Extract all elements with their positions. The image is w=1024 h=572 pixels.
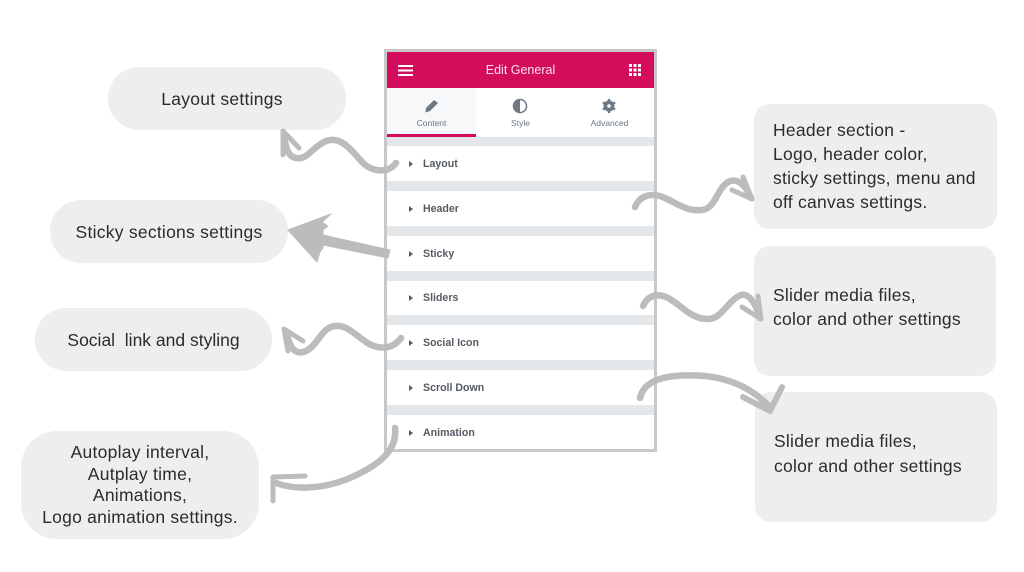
icon: hamburger menu: [398, 65, 413, 76]
icon: gear: [602, 99, 616, 113]
callout: slider settings: [754, 246, 996, 376]
row: social icon: Social Icon: [423, 337, 479, 349]
label: advanced: Advanced: [591, 118, 628, 128]
callout: sticky sections settings: [50, 200, 288, 263]
panel header: [387, 52, 654, 88]
callout: layout settings: Layout settings: [161, 88, 283, 108]
callout: slider settings: Slider media files,: [773, 285, 916, 305]
callout: social link and styling: [35, 308, 272, 371]
arrow: layout: [283, 131, 396, 170]
callout: scroll down settings: Slider media files,: [774, 431, 917, 451]
callout: header section: off canvas settings.: [773, 192, 928, 212]
callout: autoplay and animation settings: Autoplay interval,: [71, 442, 209, 462]
row: scroll down: Scroll Down: [423, 382, 484, 394]
callout: header section: Header section -: [773, 120, 905, 140]
callout: scroll down settings: color and other settings: [774, 456, 962, 476]
callout: autoplay and animation settings: [21, 431, 259, 539]
icon: half circle style: [512, 98, 528, 114]
callout: autoplay and animation settings: Logo animation settings.: [42, 506, 238, 526]
icon: grid: [629, 64, 641, 76]
callout: sticky sections settings: Sticky sections settings: [76, 222, 262, 242]
callout: autoplay and animation settings: Animations,: [93, 485, 187, 505]
arrow: social: [284, 326, 401, 352]
callout: layout settings: [108, 67, 346, 130]
callout: slider settings: color and other settings: [773, 309, 961, 329]
label: style: Style: [511, 118, 530, 128]
callout: header section: Logo, header color,: [773, 144, 928, 164]
row: layout: Layout: [423, 158, 458, 170]
heading: edit general: Edit General: [486, 63, 555, 77]
arrow: sliders: [643, 295, 761, 319]
row: sticky: Sticky: [423, 248, 454, 260]
callout: header section: sticky settings, menu and: [773, 168, 976, 188]
callout: autoplay and animation settings: Autplay time,: [88, 464, 192, 484]
arrow: animation: [273, 428, 395, 501]
callout: social link and styling: Social link and styling: [67, 330, 240, 350]
label: content: Content: [417, 118, 446, 128]
row: sliders: Sliders: [423, 292, 458, 304]
callout: scroll down settings: [755, 392, 997, 522]
row: header: Header: [423, 203, 459, 215]
icon: pencil: [426, 100, 438, 112]
arrow: sticky: [288, 214, 390, 262]
panel: edit general: [384, 49, 657, 452]
arrow: scroll down: [640, 375, 782, 411]
tab: content active: [387, 88, 476, 137]
callout: header section: [754, 104, 997, 229]
arrow: header: [635, 177, 752, 210]
row: animation: Animation: [423, 427, 475, 439]
